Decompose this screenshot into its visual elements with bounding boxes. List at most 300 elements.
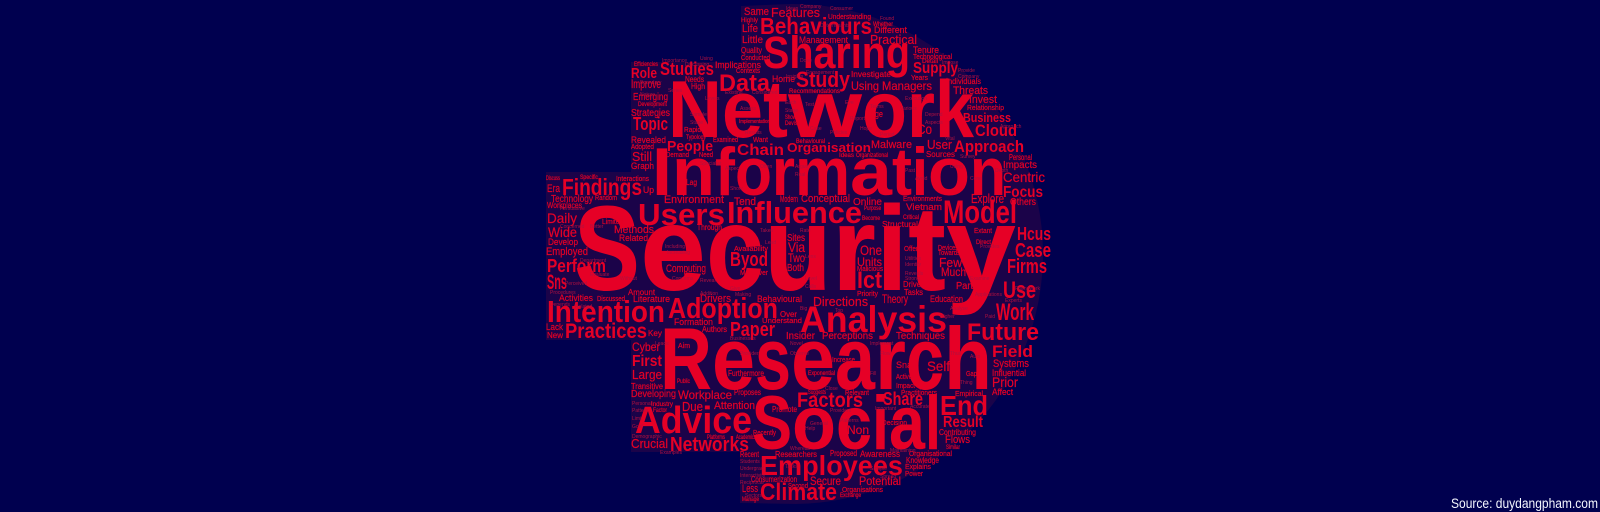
micro keywords: Leads <box>655 341 669 347</box>
tertiary keywords: Random <box>595 195 617 202</box>
tertiary keywords: Graph <box>631 161 654 171</box>
tertiary keywords: Key <box>648 329 662 338</box>
tertiary keywords: Lack <box>546 322 563 332</box>
word: Security: t <box>908 180 946 316</box>
micro keywords: Various <box>900 106 917 112</box>
word: Social: l <box>925 381 941 466</box>
tertiary keywords: High <box>691 82 705 91</box>
word: Sharing: Sharing <box>763 27 910 78</box>
tertiary keywords: Conceptual <box>801 193 850 205</box>
tertiary keywords: Personal <box>1009 153 1032 162</box>
micro keywords: Sample <box>690 112 707 118</box>
tertiary keywords: Up <box>643 185 654 195</box>
micro keywords: Sample <box>870 466 887 472</box>
word: Network: k <box>935 65 975 155</box>
tertiary keywords: Similar <box>946 445 960 451</box>
micro keywords: Strong <box>905 276 920 282</box>
micro keywords: Impose <box>942 60 959 66</box>
tertiary keywords: Theory <box>882 292 908 306</box>
micro keywords: Addition <box>700 291 718 297</box>
micro keywords: Engagement <box>806 70 835 76</box>
secondary keywords: Field <box>992 342 1033 361</box>
word: Security: i <box>876 180 908 316</box>
tertiary keywords: Gap <box>966 371 977 378</box>
secondary keywords: Adoption <box>668 293 778 325</box>
secondary keywords: Analysis <box>800 299 947 340</box>
micro keywords: Provides <box>980 244 1000 250</box>
tertiary keywords: Malicious <box>857 266 883 273</box>
secondary keywords: Behaviours <box>760 13 872 39</box>
tertiary keywords: Practical <box>870 32 917 47</box>
micro keywords: Provide <box>958 68 975 74</box>
secondary keywords: Byod <box>730 249 768 271</box>
tertiary keywords: Researchers <box>775 450 817 459</box>
tertiary keywords: User <box>927 137 953 152</box>
tertiary keywords: Potential <box>859 474 901 488</box>
tertiary keywords: Contexts <box>736 68 760 75</box>
micro keywords: Depth <box>995 168 1009 174</box>
micro keywords: Whereas <box>790 446 811 452</box>
micro keywords: Policies <box>830 130 848 136</box>
secondary keywords: Organisation <box>787 140 871 155</box>
secondary keywords: Findings <box>562 174 642 200</box>
micro keywords: Results <box>745 130 762 136</box>
secondary keywords: Networks <box>670 434 749 456</box>
micro keywords: Examine <box>970 276 990 282</box>
secondary keywords: Factors <box>797 389 863 412</box>
micro keywords: Past <box>905 168 916 174</box>
tertiary keywords: Authors <box>702 325 727 334</box>
word: Research: e <box>712 309 755 408</box>
secondary keywords: Climate <box>760 479 837 506</box>
tertiary keywords: Environment <box>664 194 724 206</box>
word: Information: i <box>912 134 928 210</box>
secondary keywords: Focus <box>1003 184 1043 201</box>
micro keywords: Examples <box>660 450 682 456</box>
tertiary keywords: Structural <box>882 220 918 229</box>
tertiary keywords: Understanding <box>828 14 871 21</box>
micro keywords: Thing <box>960 380 973 386</box>
tertiary keywords: Contributing <box>939 428 976 437</box>
secondary keywords: Users <box>638 197 725 232</box>
tertiary keywords: Impacts <box>1003 160 1037 171</box>
micro keywords: Framework <box>1015 286 1041 292</box>
micro keywords: Rate <box>800 228 811 234</box>
micro keywords: Auto <box>970 354 981 360</box>
primary keywords <box>574 27 1016 466</box>
secondary keywords: First <box>632 353 663 370</box>
secondary keywords: Intention <box>547 294 665 329</box>
tertiary keywords: Second <box>788 483 808 490</box>
micro keywords: Cone <box>970 176 982 182</box>
tertiary keywords: Academics <box>736 435 756 441</box>
word: Network: r <box>907 65 935 155</box>
micro keywords: Without <box>620 276 638 282</box>
tertiary keywords: Methods <box>614 224 654 236</box>
micro keywords: Increasing <box>667 250 690 256</box>
micro keywords: Close <box>825 386 838 392</box>
secondary keywords: Firms <box>1007 256 1047 278</box>
micro keywords: Applications <box>975 292 1002 298</box>
secondary keywords: Employees <box>760 450 903 481</box>
tertiary keywords: Both <box>787 263 804 274</box>
micro keywords: Period <box>880 132 895 138</box>
micro keywords: Goal <box>632 424 643 430</box>
tertiary keywords: Priority <box>857 291 878 298</box>
micro keywords: Levels <box>705 96 720 102</box>
micro keywords: Students <box>740 459 760 465</box>
tertiary keywords: Insider <box>786 331 816 342</box>
word: Research: e <box>791 309 835 408</box>
word: Information: I <box>652 134 672 210</box>
tertiary keywords: Limited <box>602 219 623 226</box>
tertiary keywords: Demand <box>666 152 689 159</box>
micro keywords: Boundary <box>640 80 662 86</box>
tertiary keywords: Workplace <box>678 388 732 402</box>
micro keywords: Identify <box>905 262 922 268</box>
tertiary keywords: Discussed <box>597 296 625 303</box>
tertiary keywords: Investigate <box>851 70 892 79</box>
tertiary keywords: Co <box>917 121 932 137</box>
micro keywords: Aspect <box>725 166 741 172</box>
tertiary keywords: Through <box>697 223 722 232</box>
tertiary keywords: Manage <box>742 497 760 503</box>
micro keywords: General <box>810 421 828 427</box>
secondary keywords: Sns <box>547 271 567 294</box>
tertiary keywords: Wide <box>548 224 577 240</box>
micro keywords: Assess <box>740 106 757 112</box>
micro keywords: Persuasive <box>560 206 585 212</box>
word cloud: security research terms <box>546 4 1051 506</box>
tertiary keywords: Proposed <box>830 449 857 458</box>
micro keywords: Provider <box>740 351 759 357</box>
micro keywords: Using <box>950 164 963 170</box>
tertiary keywords: Rapid <box>684 127 701 134</box>
tertiary keywords: Aim <box>678 343 690 350</box>
micro keywords: Undergrad <box>740 466 764 472</box>
tertiary keywords: Factor <box>653 408 667 414</box>
tertiary keywords: Implementation <box>739 119 770 125</box>
secondary keywords: Approach <box>954 137 1024 156</box>
secondary keywords: Ict <box>857 267 882 294</box>
micro keywords: Including <box>665 244 685 250</box>
secondary keywords: Chain <box>737 142 784 159</box>
word: Information: m <box>795 134 850 210</box>
micro keywords: Providers <box>830 408 852 414</box>
word: Security: u <box>764 180 832 316</box>
micro keywords: Stage <box>690 120 703 126</box>
tertiary keywords: Recommendations <box>789 89 840 95</box>
micro keywords: Hope <box>860 126 872 132</box>
micro keywords: Determinants <box>820 23 850 29</box>
micro keywords: Spread <box>880 474 896 480</box>
micro keywords: Demographic <box>632 434 662 440</box>
micro keywords: Series <box>668 88 683 94</box>
word: Information: o <box>735 134 772 210</box>
word: Social: i <box>872 381 889 466</box>
micro keywords: Level <box>805 276 817 282</box>
tertiary keywords: Implications <box>715 60 761 70</box>
tertiary keywords: Promote <box>772 405 797 414</box>
word: Research: a <box>835 309 876 408</box>
tertiary keywords: Technology <box>551 194 593 205</box>
tertiary keywords: Need <box>699 152 713 159</box>
micro keywords: Terms <box>870 104 884 110</box>
word: Research: s <box>755 309 791 408</box>
tertiary keywords: Relevant <box>845 390 869 397</box>
tertiary keywords: Organisational <box>909 451 952 458</box>
tertiary keywords: Others <box>1010 197 1036 208</box>
secondary keywords: Role <box>631 65 657 82</box>
tertiary keywords: Explains <box>905 464 931 471</box>
tertiary keywords: Adopted <box>631 144 654 151</box>
micro keywords: Concerned <box>560 224 585 230</box>
tertiary keywords: Devices <box>938 245 958 252</box>
tertiary keywords: Tasks <box>904 288 923 297</box>
micro keywords: Accurate <box>910 404 930 410</box>
tertiary keywords: Attention <box>714 400 755 412</box>
tertiary keywords: Highly <box>741 18 758 24</box>
tertiary keywords: Improve <box>631 77 661 91</box>
tertiary keywords: Specific <box>580 175 598 181</box>
tertiary keywords: Proposes <box>734 388 761 397</box>
tertiary keywords: Extant <box>974 228 992 235</box>
tertiary keywords: Interactions <box>616 176 649 183</box>
tertiary keywords: Techniques <box>896 331 945 342</box>
tertiary keywords: Years <box>911 75 928 82</box>
word: Security: e <box>640 180 706 316</box>
tertiary keywords: Exponential <box>808 371 835 377</box>
word: Social: o <box>792 381 836 466</box>
word: Network: o <box>862 65 907 155</box>
micro keywords: Implement <box>870 341 894 347</box>
tertiary keywords: Want <box>753 137 768 144</box>
micro keywords: Taken <box>760 228 774 234</box>
micro keywords: Utilities <box>905 256 922 262</box>
word: Network: t <box>763 65 788 155</box>
tertiary keywords: Revealed <box>631 135 666 145</box>
tertiary keywords: New <box>547 331 563 340</box>
micro keywords: Personal <box>632 401 652 407</box>
word: Social: a <box>889 381 926 466</box>
tertiary keywords: Explore <box>971 191 1004 206</box>
tertiary keywords: Daily <box>547 210 577 226</box>
secondary keywords: Supply <box>913 60 958 77</box>
tertiary keywords: Threats <box>953 85 988 97</box>
tertiary keywords: Shows <box>785 115 798 121</box>
word: Information: n <box>970 134 1006 210</box>
micro keywords: Concerns <box>672 276 694 282</box>
tertiary keywords: Whether <box>873 22 893 28</box>
micro keywords: Making <box>735 292 751 298</box>
secondary keywords: Hcus <box>1017 224 1051 244</box>
secondary keywords: Advice <box>635 400 752 442</box>
micro keywords: Considered <box>752 90 778 96</box>
tertiary keywords: Purpose <box>864 206 881 212</box>
word: Research: c <box>906 309 944 408</box>
micro keywords: Perceived <box>565 281 587 287</box>
tertiary keywords: One <box>860 242 882 258</box>
tertiary keywords: Increase <box>832 357 855 364</box>
tertiary keywords: Employed <box>546 246 588 258</box>
tertiary keywords: Sna <box>896 360 912 370</box>
tertiary keywords: Development <box>638 102 667 108</box>
tertiary keywords: Part <box>956 281 973 292</box>
tertiary keywords: Critical <box>903 215 919 221</box>
secondary keywords: People <box>667 138 713 155</box>
tertiary keywords: Decision <box>882 420 907 427</box>
tertiary keywords: Influential <box>992 368 1026 378</box>
micro keywords: Reciprocal <box>740 480 764 486</box>
micro keywords: Found <box>880 16 894 22</box>
tertiary keywords: Cyber <box>632 340 660 354</box>
micro keywords: Ideas <box>786 6 799 12</box>
tertiary keywords: Practitioners <box>901 390 937 397</box>
tertiary keywords: Recent <box>740 450 760 459</box>
micro keywords: Using <box>700 56 713 62</box>
tertiary keywords: Managers <box>882 79 932 93</box>
tertiary keywords: Developing <box>631 389 676 400</box>
micro keywords: Evaluate <box>590 272 610 278</box>
micro keywords: Pattern <box>632 408 648 414</box>
secondary keywords: Cloud <box>975 121 1017 140</box>
word: Information: f <box>715 134 735 210</box>
tertiary keywords: Moreover <box>740 270 769 277</box>
tertiary keywords: Exchange <box>840 493 862 499</box>
tertiary keywords: Strategies <box>631 108 670 119</box>
micro keywords: Aspects <box>925 120 943 126</box>
micro keywords: Depends <box>550 302 571 308</box>
secondary keywords <box>547 13 1051 506</box>
tertiary keywords: Formation <box>674 317 713 327</box>
micro keywords: Thus <box>950 351 962 357</box>
word: Security: r <box>832 180 876 316</box>
tertiary keywords: Suggests <box>808 390 826 396</box>
micro keywords: Vital <box>945 136 955 142</box>
tertiary keywords: Related <box>619 233 648 243</box>
tertiary keywords: Tenure <box>913 45 939 55</box>
secondary keywords: Model <box>943 194 1017 230</box>
micro keywords: Businesses <box>730 336 756 342</box>
micro keywords: Consumer <box>830 6 853 12</box>
micro keywords: Procedures <box>550 290 576 296</box>
micro keywords: Experts <box>1005 298 1022 304</box>
tertiary keywords: Organisations <box>842 487 883 494</box>
micro keywords: Insights <box>786 74 804 80</box>
tertiary keywords: Detail <box>922 59 938 65</box>
tertiary keywords: Discuss <box>546 176 560 182</box>
micro keywords: Reveal <box>700 278 716 284</box>
secondary keywords: Business <box>963 110 1011 125</box>
micro keywords: Existing <box>725 90 743 96</box>
tertiary keywords: Via <box>788 239 805 255</box>
secondary keywords: End <box>940 390 988 421</box>
tertiary keywords: Public <box>677 379 690 385</box>
secondary keywords: Practices <box>565 320 647 343</box>
micro keywords: Show <box>730 186 743 192</box>
tertiary keywords: Flows <box>945 434 970 446</box>
micro keywords: Each <box>785 100 797 106</box>
tertiary keywords: Life <box>742 23 758 35</box>
micro keywords: Big <box>800 306 807 312</box>
tertiary keywords: Sources <box>926 150 955 159</box>
word: Research: r <box>875 309 906 408</box>
tertiary keywords: Platforms <box>707 435 725 441</box>
tertiary keywords: Due <box>682 399 703 414</box>
tertiary keywords: Malware <box>871 139 912 151</box>
tertiary keywords: Systems <box>993 358 1029 370</box>
micro keywords: Often <box>760 164 772 170</box>
word: Security: S <box>574 180 640 316</box>
tertiary keywords: Workplaces <box>547 201 582 210</box>
tertiary keywords: Environments <box>903 196 942 203</box>
secondary keywords: Influence <box>727 195 862 230</box>
word: Research: h <box>944 309 992 408</box>
micro keywords: Help <box>805 426 816 432</box>
micro keywords: Company <box>958 74 980 80</box>
secondary keywords: Use <box>1003 277 1036 304</box>
tertiary keywords: Computing <box>666 263 706 275</box>
micro keywords: Observe <box>790 351 809 357</box>
tertiary keywords: Transitive <box>631 382 664 391</box>
micro keywords: Limit <box>632 416 643 422</box>
micro keywords: Tasks <box>785 464 798 470</box>
tertiary keywords: Understand <box>762 318 802 325</box>
secondary keywords: Topic <box>633 114 668 134</box>
secondary keywords: Future <box>967 319 1039 346</box>
micro keywords: Avoid <box>915 176 928 182</box>
tertiary keywords: Develop <box>548 237 578 247</box>
micro keywords: Stage <box>785 108 798 114</box>
word: Network: w <box>787 65 863 155</box>
micro keywords: Eye <box>845 100 854 106</box>
micro keywords: Nature <box>640 92 655 98</box>
tertiary keywords: Devise <box>785 121 801 127</box>
secondary keywords: Share <box>883 389 923 409</box>
tertiary keywords: Amount <box>628 288 656 297</box>
secondary keywords: Data <box>719 70 771 97</box>
micro keywords: Analyse <box>950 306 968 312</box>
micro keywords: Sectors <box>745 493 762 499</box>
micro keywords: Paid <box>985 314 995 320</box>
micro keywords: Discussing <box>685 62 709 68</box>
tertiary keywords: Secure <box>810 474 841 488</box>
tertiary keywords: Units <box>857 255 882 269</box>
tertiary keywords: Affect <box>992 387 1013 397</box>
tertiary keywords: Industry <box>651 402 673 408</box>
tertiary keywords: Empirical <box>955 391 983 398</box>
tertiary keywords: Technological <box>913 54 952 61</box>
micro keywords: Higher <box>940 314 955 320</box>
cloud silhouette backing <box>546 4 1043 504</box>
tertiary keywords: Less <box>742 483 758 495</box>
tertiary keywords: Power <box>905 471 924 478</box>
secondary keywords: Studies <box>660 59 714 79</box>
tertiary keywords: Emerging <box>633 92 668 103</box>
tertiary keywords: Organizational <box>856 153 888 159</box>
tertiary keywords: Management <box>799 35 848 45</box>
secondary keywords: Study <box>796 67 851 92</box>
tertiary keywords: Modern <box>780 194 798 204</box>
tertiary keywords: Using <box>851 79 879 93</box>
tertiary keywords: Impact <box>896 383 915 390</box>
tertiary keywords: Invest <box>969 94 997 106</box>
tertiary keywords: Sites <box>787 233 805 244</box>
secondary keywords: Work <box>996 299 1034 326</box>
secondary keywords: Paper <box>730 319 775 341</box>
word: Research: R <box>660 309 712 408</box>
tertiary keywords: Lag <box>686 178 697 187</box>
